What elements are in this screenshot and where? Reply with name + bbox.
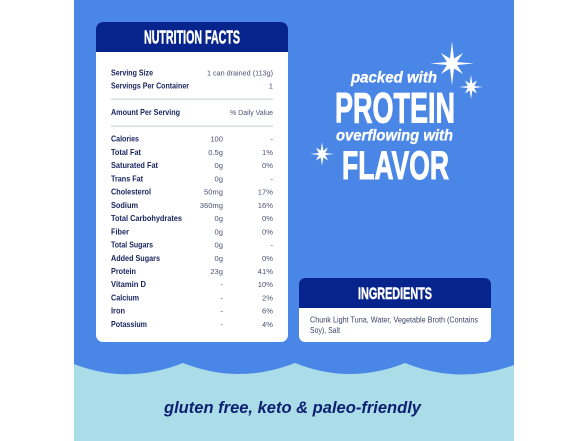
row: cholesterol: Cholesterol xyxy=(111,187,151,197)
row: vitamin d: Vitamin D xyxy=(111,279,146,289)
row: protein: Protein xyxy=(111,266,136,276)
icon: small sparkle left xyxy=(310,142,334,166)
row: saturated fat: Saturated Fat xyxy=(111,160,158,170)
row: vitamin d xyxy=(111,279,273,289)
row: total sugars: Total Sugars xyxy=(111,240,153,250)
row: total sugars: - xyxy=(270,240,273,250)
row: amount per serving: Amount Per Serving xyxy=(111,107,180,117)
tagline: gluten free, keto & paleo-friendly xyxy=(163,398,422,417)
panel: ingredients xyxy=(299,278,491,342)
text: protein: PROTEIN xyxy=(335,86,455,133)
row: trans fat xyxy=(111,173,273,183)
row: amount per serving: % Daily Value xyxy=(230,108,273,117)
row: added sugars: 0% xyxy=(262,254,273,263)
row: calories: 100 xyxy=(210,135,223,144)
row: trans fat: 0g xyxy=(215,174,223,183)
row: servings per container: 1 xyxy=(269,82,273,91)
row: cholesterol: 17% xyxy=(258,188,273,197)
ingredients card header xyxy=(299,278,491,308)
row: iron: - xyxy=(220,307,223,316)
ingredients card body xyxy=(299,278,491,342)
row: fiber: 0g xyxy=(215,227,223,236)
row: calories xyxy=(111,134,273,144)
row: potassium: Potassium xyxy=(111,319,147,329)
row: protein: 23g xyxy=(210,267,223,276)
row: added sugars xyxy=(111,253,273,263)
row: potassium: 4% xyxy=(262,320,273,329)
row: sodium: Sodium xyxy=(111,200,138,210)
row: calories: Calories xyxy=(111,134,139,144)
row: servings per container xyxy=(111,81,273,91)
row: saturated fat: 0g xyxy=(215,161,223,170)
heading: ingredients: INGREDIENTS xyxy=(358,284,432,303)
panel: nutrition facts xyxy=(96,22,288,342)
row: sodium xyxy=(111,200,273,210)
text: packed with: packed with xyxy=(350,70,437,87)
ingredients text: Chunk Light Tuna, Water, Vegetable Broth (Contains xyxy=(310,314,478,324)
ingredients text: Soy), Salt xyxy=(310,325,340,335)
row: fiber xyxy=(111,226,273,236)
row: sodium: 360mg xyxy=(200,201,223,210)
row: saturated fat: 0% xyxy=(262,161,273,170)
row: amount per serving xyxy=(111,107,273,117)
row: iron: 6% xyxy=(262,307,273,316)
row: trans fat: - xyxy=(270,174,273,183)
row: saturated fat xyxy=(111,160,273,170)
icon: small sparkle right xyxy=(459,75,483,99)
row: protein xyxy=(111,266,273,276)
row: serving size xyxy=(111,67,273,77)
row: calcium: - xyxy=(220,293,223,302)
row: total fat xyxy=(111,147,273,157)
row: total carbohydrates xyxy=(111,213,273,223)
text: flavor: FLAVOR xyxy=(342,144,449,188)
row: calories: - xyxy=(270,135,273,144)
row: total fat: 0.5g xyxy=(208,148,223,157)
row: protein: 41% xyxy=(258,267,273,276)
text: overflowing with: overflowing with xyxy=(336,128,453,145)
row: calcium xyxy=(111,292,273,302)
row: total carbohydrates: 0g xyxy=(215,214,223,223)
row: iron xyxy=(111,306,273,316)
row: calcium: Calcium xyxy=(111,292,139,302)
nutrition card body xyxy=(96,22,288,342)
row: servings per container: Servings Per Container xyxy=(111,81,190,91)
row: iron: Iron xyxy=(111,306,125,316)
row: potassium xyxy=(111,319,273,329)
nutrition card header xyxy=(96,22,288,52)
row: cholesterol: 50mg xyxy=(204,188,223,197)
row: potassium: - xyxy=(220,320,223,329)
row: fiber: Fiber xyxy=(111,226,130,236)
row: serving size: Serving Size xyxy=(111,67,153,77)
row: total fat: 1% xyxy=(262,148,273,157)
scalloped light-blue bottom band xyxy=(74,363,514,441)
row: total fat: Total Fat xyxy=(111,147,141,157)
row: added sugars: 0g xyxy=(215,254,223,263)
row: calcium: 2% xyxy=(262,293,273,302)
row: added sugars: Added Sugars xyxy=(111,253,160,263)
row: total sugars: 0g xyxy=(215,240,223,250)
icon: large sparkle xyxy=(430,42,474,86)
row: trans fat: Trans Fat xyxy=(111,173,143,183)
row: vitamin d: - xyxy=(220,280,223,289)
row: sodium: 16% xyxy=(258,201,273,210)
headline: packed with protein overflowing with flavor xyxy=(335,70,455,188)
row: fiber: 0% xyxy=(262,227,273,236)
ingredients text xyxy=(310,314,478,335)
row: vitamin d: 10% xyxy=(258,280,273,289)
heading: nutrition facts: NUTRITION FACTS xyxy=(144,28,240,48)
row: total sugars xyxy=(111,240,273,250)
row: total carbohydrates: Total Carbohydrates xyxy=(111,213,182,223)
row: serving size: 1 can drained (113g) xyxy=(207,68,273,77)
background: blue panel xyxy=(74,0,514,441)
row: total carbohydrates: 0% xyxy=(262,214,273,223)
row: cholesterol xyxy=(111,187,273,197)
